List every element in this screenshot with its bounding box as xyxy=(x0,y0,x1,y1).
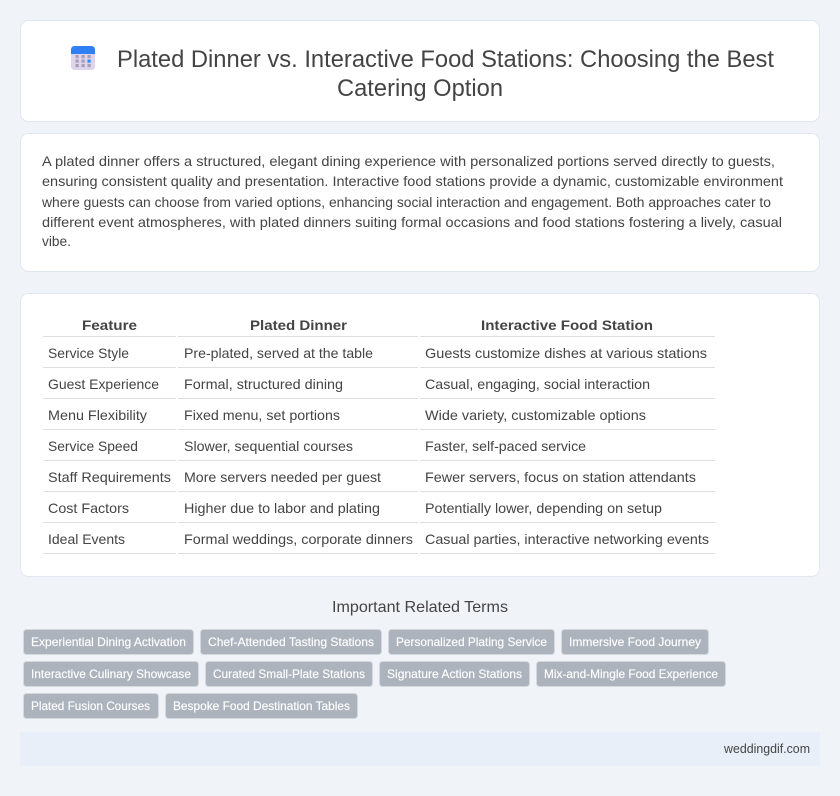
text block: introduction: ensuring consistent quality and presentation. Interactive food stations provide a dynamic, customizable environment xyxy=(42,173,783,189)
title: Catering Option xyxy=(337,75,503,102)
text block: introduction: different event atmospheres, with plated dinners suiting formal occasions and food stations fostering a lively, casual xyxy=(42,214,782,230)
panel: header xyxy=(20,20,820,122)
panel: related terms chips: Bespoke Food Destination Tables xyxy=(173,699,350,713)
panel: related terms chips xyxy=(24,630,726,718)
table row: ideal events: Casual parties, interactive networking events xyxy=(425,531,709,547)
table row: staff requirements: Staff Requirements xyxy=(48,469,171,485)
footer xyxy=(20,732,820,766)
table header row: Interactive Food Station xyxy=(481,317,653,333)
table row: service style xyxy=(48,345,707,361)
table row: service style: Pre-plated, served at the table xyxy=(184,345,373,361)
table header row: Feature xyxy=(82,317,137,333)
footer: weddingdif.com xyxy=(723,741,810,756)
table row: service speed: Faster, self-paced service xyxy=(425,438,586,454)
panel: related terms chips: Immersive Food Journey xyxy=(569,635,701,649)
panel: related terms chips: Curated Small-Plate Stations xyxy=(213,667,365,681)
table row: cost factors xyxy=(48,500,662,516)
panel: comparison table xyxy=(20,294,820,576)
panel: related terms chips: Chef-Attended Tasting Stations xyxy=(208,635,374,649)
table row: service speed: Service Speed xyxy=(48,438,138,454)
table row: service speed: Slower, sequential courses xyxy=(184,438,353,454)
text block: introduction: A plated dinner offers a structured, elegant dining experience with personalized portions served directly to guests, xyxy=(42,153,775,169)
table header row: Plated Dinner xyxy=(250,317,348,333)
table row: cost factors: Potentially lower, depending on setup xyxy=(425,500,662,516)
table row: ideal events xyxy=(48,531,709,547)
panel: related terms chips: Plated Fusion Courses xyxy=(31,699,150,713)
table row: menu flexibility: Menu Flexibility xyxy=(48,407,147,423)
table row: guest experience: Guest Experience xyxy=(48,376,159,392)
table row: ideal events: Formal weddings, corporate dinners xyxy=(184,531,413,547)
table row: menu flexibility xyxy=(48,407,646,423)
table row: service speed xyxy=(48,438,586,454)
table row: cost factors: Higher due to labor and plating xyxy=(184,500,380,516)
table row: guest experience: Formal, structured dining xyxy=(184,376,343,392)
table row: guest experience: Casual, engaging, social interaction xyxy=(425,376,650,392)
panel: related terms chips: Mix-and-Mingle Food Experience xyxy=(544,667,718,681)
table row: ideal events: Ideal Events xyxy=(48,531,125,547)
table header row xyxy=(82,317,653,333)
table row: service style: Guests customize dishes at various stations xyxy=(425,345,707,361)
table row: staff requirements xyxy=(48,469,696,485)
icon: calendar xyxy=(71,46,95,70)
title xyxy=(117,46,774,102)
panel: introduction text xyxy=(20,134,820,272)
panel: related terms chips: Interactive Culinary Showcase xyxy=(31,667,191,681)
panel: related terms chips: Signature Action Stations xyxy=(387,667,522,681)
text block: introduction: where guests can choose from varied options, enhancing social interaction and engagement. Both approaches cater to xyxy=(41,194,771,210)
table row: menu flexibility: Wide variety, customizable options xyxy=(425,407,646,423)
table row: service style: Service Style xyxy=(48,345,129,361)
table row: staff requirements: More servers needed per guest xyxy=(184,469,381,485)
text block: introduction: vibe. xyxy=(42,233,71,249)
table row: cost factors: Cost Factors xyxy=(48,500,129,516)
panel: related terms chips: Experiential Dining Activation xyxy=(31,635,186,649)
table row: staff requirements: Fewer servers, focus on station attendants xyxy=(425,469,696,485)
panel: related terms chips: Personalized Plating Service xyxy=(396,635,547,649)
heading: important related terms: Important Related Terms xyxy=(332,599,508,616)
text block: introduction xyxy=(41,153,783,249)
table row: menu flexibility: Fixed menu, set portions xyxy=(184,407,340,423)
table row: guest experience xyxy=(48,376,650,392)
title: Plated Dinner vs. Interactive Food Stations: Choosing the Best xyxy=(117,46,774,73)
